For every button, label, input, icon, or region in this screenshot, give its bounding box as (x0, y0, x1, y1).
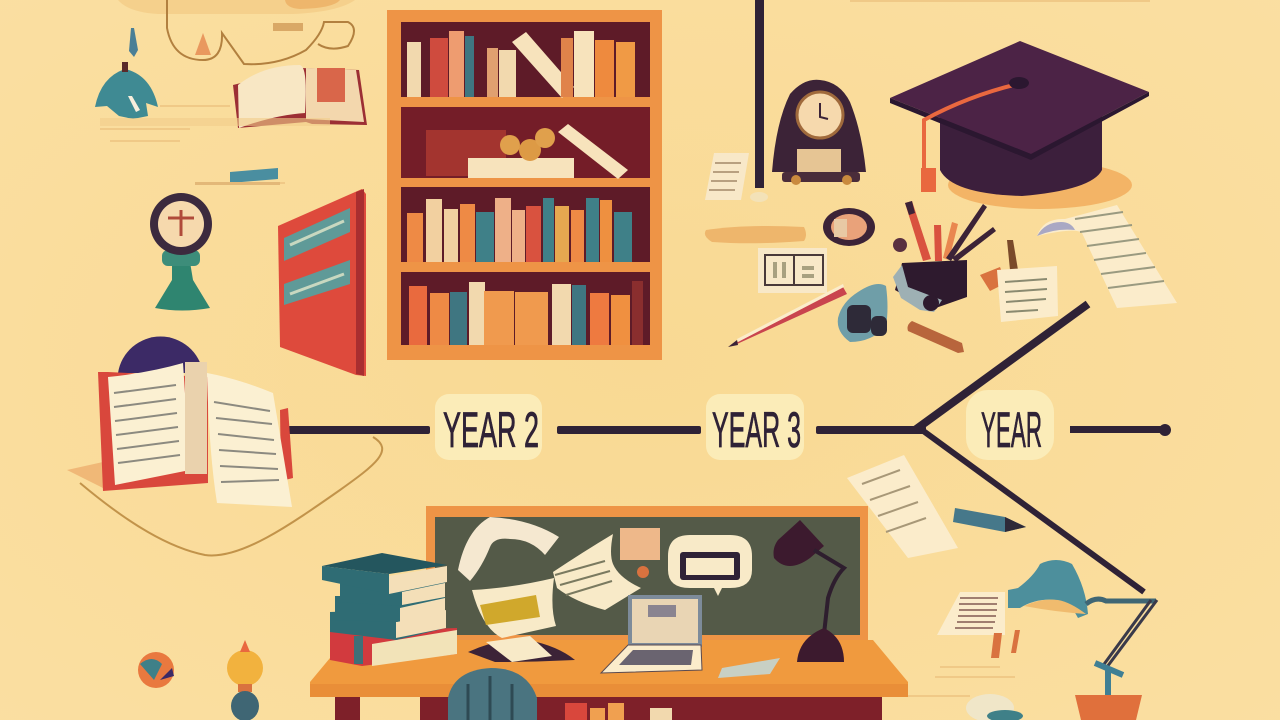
icon: drop (129, 28, 138, 57)
label: year 3: YEAR 3 (712, 402, 801, 458)
icon: floating papers (458, 517, 660, 638)
top-left sketch and books (95, 0, 367, 128)
lower left icons (138, 640, 263, 720)
icon: marker (195, 168, 280, 185)
icon: light bulb (227, 640, 263, 720)
chalkboard (426, 506, 868, 646)
icon: small cone (195, 33, 211, 55)
icon: stack of books (322, 553, 457, 666)
shelf 1 books (407, 31, 635, 98)
icon: paper note (705, 153, 749, 200)
shelf 4 books (409, 281, 643, 345)
shelf 2 contents (426, 124, 628, 179)
label: year 3 (706, 394, 804, 460)
icon: pencil cup (893, 201, 996, 312)
icon: curled paper (1037, 205, 1177, 308)
graduation cap (890, 41, 1149, 209)
icon: mantel clock (772, 80, 866, 185)
icon: open book (233, 65, 367, 128)
desk (310, 520, 908, 720)
icon: papers on desk (468, 636, 780, 678)
right lower items (847, 455, 1157, 720)
bookshelf (387, 10, 662, 360)
icon: teal lamp (95, 62, 158, 119)
left globe and open book (67, 337, 382, 555)
icon: desk lamp (774, 520, 844, 662)
bottom book scrap (966, 694, 1023, 720)
icon: red pencil (728, 284, 847, 347)
vertical timeline line (750, 0, 768, 202)
icon: laptop (601, 597, 702, 673)
icon: chair (448, 668, 537, 720)
timeline (288, 304, 1171, 592)
icon: brown marker (908, 321, 964, 353)
small orange items (980, 267, 1006, 291)
under-desk books (565, 703, 672, 720)
icon: small chart card (758, 248, 827, 293)
smudge (705, 226, 806, 243)
icon: speech bubble (668, 535, 752, 596)
shelf 3 books (407, 198, 632, 262)
icon: globe (138, 652, 174, 688)
icon: paper (847, 455, 958, 558)
desk items cluster (705, 201, 1177, 353)
label: year (966, 390, 1054, 460)
icon: small disc (823, 208, 875, 246)
icon: sharpener (838, 284, 888, 342)
label: year 2 (435, 394, 542, 460)
icon: small note (937, 592, 1005, 635)
label: year 2: YEAR 2 (443, 402, 539, 458)
icon: red book (278, 189, 366, 376)
icon: marker (953, 508, 1026, 532)
icon: teal desk lamp (1008, 560, 1157, 720)
label: year: YEAR (981, 402, 1042, 458)
icon: note small (997, 266, 1058, 322)
icon: round clock on stand (150, 193, 212, 310)
